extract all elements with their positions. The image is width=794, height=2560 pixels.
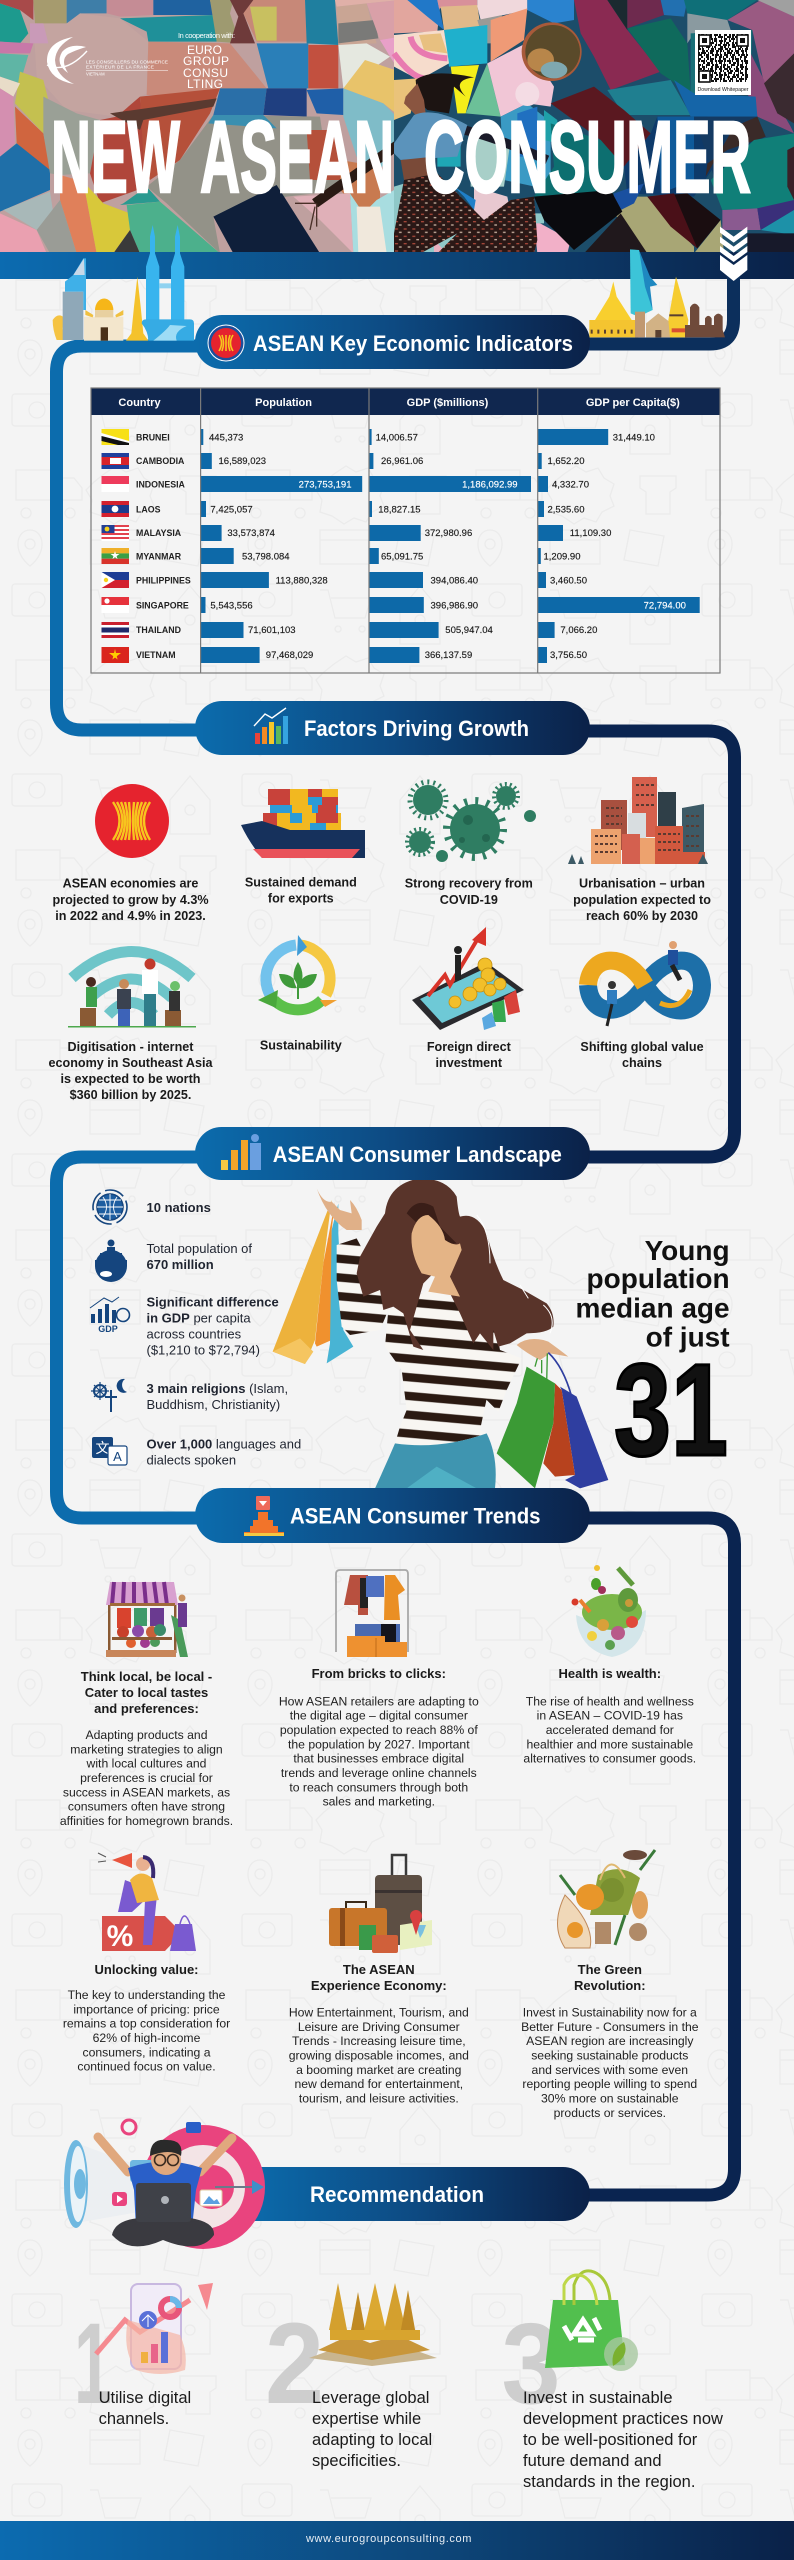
text: languages: Over 1,000 languages and [146,1436,301,1452]
logo: Eurogroup Consulting: CONSU [183,66,228,80]
text: bricks to clicks: to reach consumers through both [289,1780,468,1794]
text: sustainable practices: to be well-positioned for [523,2431,698,2449]
blue header band [0,252,794,279]
text: ASEAN growth projection: projected to grow by 4.3% [52,893,209,907]
population values: 273,753,191 [299,480,352,490]
text: think local: and preferences: [94,1701,199,1716]
logo: French foreign trade advisors: EXTÉRIEUR DE LA FRANCE [86,64,154,70]
country names: MYANMAR [136,551,182,561]
text: sustained demand: for exports [268,892,334,906]
icon: ASEAN emblem [95,784,169,858]
callout: young population [576,1235,730,1483]
logo: Eurogroup Consulting: LTING [187,77,223,91]
population values: 97,468,029 [266,650,313,661]
flags [102,429,129,663]
text: think local: affinities for homegrown brands. [60,1814,233,1828]
population values [209,432,352,661]
callout: young population: population [587,1263,730,1294]
icon: woman on price tag [98,1853,196,1953]
icon: green shopping bag and goods [558,1850,655,1948]
text: leverage global expertise: Leverage global [312,2389,429,2407]
text: GDP difference: across countries [146,1326,242,1342]
section title: ASEAN Key Economic Indicators [195,315,590,369]
GDP values: 18,827.15 [378,504,421,516]
QR code [695,30,751,95]
text: health is wealth: The rise of health and wellness [526,1694,694,1708]
text: green revolution: ASEAN region are increasingly [526,2034,694,2048]
table header [91,388,720,415]
country names: LAOS [136,504,161,514]
icon: digitisation group with wifi [68,952,196,1028]
text: foreign direct investment: investment [436,1056,503,1070]
icon: green recycling bag [545,2271,638,2371]
callout: young population: 31 [614,1336,728,1483]
section title: Factors Driving Growth: Factors Driving Growth [304,716,529,741]
icon: GDP chart: GDP [98,1324,118,1334]
text: think local: success in ASEAN markets, as [63,1785,230,1799]
country names: PHILIPPINES [136,575,191,585]
callout: young population: Young [645,1235,730,1266]
GDP per capita values: 72,794.00 [644,600,686,612]
callout: young population: of just [646,1322,730,1352]
icon: golden temple [309,2283,437,2366]
section title: ASEAN Consumer Landscape: ASEAN Consumer Landscape [273,1142,562,1167]
icon: religions [91,1379,127,1412]
headline: NEW [51,100,180,214]
GDP per capita values: 2,535.60 [548,504,584,516]
text: sustainability: Sustainability [260,1038,342,1052]
illustration: woman with shopping bags [273,1178,608,1488]
country names: VIETNAM [136,650,176,660]
text: think local: Cater to local tastes [85,1685,208,1700]
GDP values: 1,186,092.99 [462,480,518,490]
text: unlocking value: The key to understanding the [68,1988,226,2002]
text: sustained demand: Sustained demand [245,876,357,890]
GDP values: 372,980.96 [425,528,472,539]
skyline left [53,225,194,341]
GDP per capita values [544,432,686,661]
recommendation 2 [265,2283,437,2470]
GDP per capita values: 7,066.20 [560,625,597,636]
text: 10 nations: 10 nations [146,1200,211,1215]
text: think local [60,1669,233,1828]
section title: Factors Driving Growth [195,701,590,755]
text: experience economy: Leisure are Driving Consumer [298,2020,460,2034]
population values: 71,601,103 [248,625,296,636]
number 3: 3 [502,2300,560,2428]
text: unlocking value: Unlocking value: [94,1962,199,1977]
table bars [201,429,700,663]
text: recovery: Strong recovery from [405,876,533,890]
text: green revolution: 30% more on sustainable [541,2092,679,2106]
text: unlocking value: consumers, indicating a [82,2045,211,2059]
GDP per capita values: 1,209.90 [544,552,580,562]
text: urbanisation: Urbanisation – urban [579,876,705,890]
population values: 7,425,057 [210,504,253,516]
text: ASEAN growth projection: ASEAN economies are [63,876,198,890]
text: health is wealth: Health is wealth: [559,1666,661,1681]
callout: young population: median age [576,1292,730,1324]
footer band [0,2521,794,2560]
connector lines between sections [56,270,734,2195]
text: global value chains: Shifting global value [580,1040,704,1054]
icon: globe [93,1190,127,1224]
footer band: www.eurogroupconsulting.com [305,2533,472,2545]
text: green revolution: Invest in Sustainability now for a [523,2006,697,2020]
text: sustainable practices: Invest in sustainable [523,2389,673,2407]
GDP values: 65,091.75 [381,552,423,562]
text: sustainable practices: development practices now [523,2410,723,2428]
icon: salad bowl [572,1565,646,1657]
icon: phone with chart [96,2283,213,2374]
population values: 16,589,023 [218,456,266,467]
text: green revolution: reporting people willing to spend [522,2077,697,2091]
table header: GDP ($millions) [407,397,489,409]
text: green revolution: and services with some even [532,2063,688,2077]
GDP per capita values: 11,109.30 [570,528,611,539]
text: total population: 670 million [146,1257,214,1272]
text: GDP difference: ($1,210 to $72,794) [146,1342,260,1358]
skyline right [589,249,725,337]
population values: 53,798.084 [242,552,290,562]
text: think local: Adapting products and [86,1728,207,1742]
GDP per capita values: 31,449.10 [613,432,655,444]
text: think local: Think local, be local - [81,1669,212,1684]
recommendation 3 [502,2271,723,2491]
text: digitisation: is expected to be worth [61,1072,200,1086]
text: green revolution: products or services. [554,2106,666,2120]
text: leverage global expertise: specificities. [312,2452,401,2470]
text: religions: Buddhism, Christianity) [146,1397,280,1412]
text: utilise digital channels: channels. [99,2410,169,2428]
population values: 5,543,556 [210,600,253,612]
text: religions: 3 main religions (Islam, [146,1381,288,1396]
table header: Country [118,397,161,409]
GDP values: 396,986.90 [430,600,478,612]
icon: translation [92,1437,127,1465]
section title: ASEAN Consumer Trends: ASEAN Consumer Trends [290,1504,540,1528]
text: unlocking value [63,1962,230,2074]
text: total population: Total population of [146,1241,252,1256]
text: ASEAN growth projection: in 2022 and 4.9% in 2023. [55,909,206,923]
icon: infinity value chains [588,941,702,1026]
logo: Eurogroup Consulting [178,31,235,91]
icon: GDP chart [90,1297,130,1334]
GDP values: 505,947.04 [445,625,493,636]
section title: ASEAN Consumer Trends [195,1488,590,1543]
text: green revolution: seeking sustainable products [531,2048,688,2062]
text: bricks to clicks [279,1666,479,1809]
country names: CAMBODIA [136,456,185,466]
text: GDP difference: in GDP per capita [146,1310,251,1326]
text: green revolution [521,1962,699,2120]
text: experience economy: new demand for entertainment, [294,2077,463,2091]
text: recovery: COVID-19 [440,893,498,907]
text: leverage global expertise: expertise while [312,2410,421,2428]
text: green revolution: Revolution: [574,1978,646,1993]
text: unlocking value: importance of pricing: price [73,2002,220,2016]
icon: sustainability cycle [258,935,337,1010]
illustration: man with megaphone and target [64,2120,265,2249]
text: health is wealth [523,1666,696,1766]
text: think local: marketing strategies to align [70,1742,223,1756]
text: experience economy [289,1962,469,2106]
text: health is wealth: in ASEAN – COVID-19 has [537,1709,683,1723]
logo: Eurogroup Consulting: EURO [187,43,222,57]
text: utilise digital channels: Utilise digital [99,2389,191,2407]
country names: SINGAPORE [136,600,189,610]
table header: Population [255,397,312,409]
icon: market stall [106,1582,188,1657]
GDP values [376,432,518,661]
text: unlocking value: 62% of high-income [93,2031,201,2045]
text: think local: with local cultures and [86,1757,206,1771]
icon: woman on price tag: % [107,1920,133,1953]
section title: ASEAN Key Economic Indicators: ASEAN Key Economic Indicators [253,331,573,356]
icon: translation: A [113,1449,122,1464]
text: leverage global expertise: adapting to local [312,2431,432,2449]
icon: city skyline [568,777,708,864]
country names [136,432,191,660]
text: bricks to clicks: that businesses embrace digital [293,1752,464,1766]
section title: Recommendation: Recommendation [310,2182,484,2207]
GDP values: 14,006.57 [376,432,418,444]
GDP per capita values: 1,652.20 [548,456,584,467]
number 1: 1 [74,2300,112,2428]
text: digitisation: $360 billion by 2025. [70,1088,191,1102]
data table [91,388,720,673]
logo: French foreign trade advisors: LES CONSEILLERS DU COMMERCE [86,60,168,64]
GDP per capita values: 4,332.70 [552,480,589,490]
text: green revolution: Better Future - Consumers in the [521,2020,699,2034]
text: bricks to clicks: sales and marketing. [323,1795,435,1809]
icon: chevrons pointing down [720,227,747,281]
text: urbanisation: reach 60% by 2030 [586,909,698,923]
text: bricks to clicks: How ASEAN retailers are adapting to [279,1694,479,1708]
GDP values: 26,961.06 [381,456,423,467]
text: bricks to clicks: population expected to reach 88% of [280,1723,478,1737]
text: sustainable practices: standards in the region. [523,2473,695,2491]
text: health is wealth: accelerated demand for [546,1723,674,1737]
text: GDP difference: Significant difference [146,1294,279,1310]
text: bricks to clicks: the population by 2027. Important [288,1737,470,1751]
logo: Eurogroup Consulting: GROUP [183,54,229,68]
GDP values: 366,137.59 [425,650,472,661]
recommendation 1 [74,2283,213,2428]
population values: 445,373 [209,432,243,444]
population values: 33,573,874 [227,528,275,539]
text: digitisation: economy in Southeast Asia [48,1056,213,1070]
text: experience economy: The ASEAN [343,1962,415,1977]
text: global value chains: chains [622,1056,662,1070]
text: experience economy: Trends - Increasing leisure time, [292,2034,466,2048]
text: foreign direct investment: Foreign direct [427,1040,512,1054]
country names: THAILAND [136,625,181,635]
text: experience economy: How Entertainment, Tourism, and [289,2006,469,2020]
headline: ASEAN [200,100,394,214]
text: experience economy: tourism, and leisure activities. [299,2092,459,2106]
icon: population globe [95,1240,127,1282]
text: green revolution: The Green [578,1962,642,1977]
text: bricks to clicks: trends and leverage online channels [281,1766,477,1780]
GDP values: 394,086.40 [430,576,478,586]
section title: Recommendation [240,2167,590,2221]
icon: suitcases and map [329,1855,432,1953]
text: urbanisation: population expected to [573,893,711,907]
text: health is wealth: healthier and more sustainable [526,1737,693,1751]
headline [51,100,751,214]
country names: BRUNEI [136,432,170,442]
text: experience economy: growing disposable incomes, and [289,2048,469,2062]
country names: INDONESIA [136,479,186,489]
icon: clothes rack and boxes [336,1570,408,1657]
text: sustainable practices: future demand and [523,2452,662,2470]
logo: Eurogroup Consulting: In cooperation with: [178,31,235,40]
text: experience economy: Experience Economy: [311,1978,447,1993]
icon: coronavirus [407,782,536,862]
section title: ASEAN Consumer Landscape [195,1127,590,1180]
text: digitisation: Digitisation - internet [68,1040,194,1054]
icon: foreign direct investment phone and coins [412,927,524,1030]
population values: 113,880,328 [276,576,328,586]
logo: French foreign trade advisors: VIETNAM [86,72,105,76]
number 2: 2 [265,2300,324,2428]
text: bricks to clicks: From bricks to clicks: [312,1666,446,1681]
text: think local: consumers often have strong [68,1800,225,1814]
icon: translation: 文 [96,1440,110,1456]
text: health is wealth: alternatives to consumer goods. [523,1752,696,1766]
text: experience economy: a booming market are creating [296,2063,461,2077]
text: bricks to clicks: the digital age – digital consumer [290,1709,468,1723]
hero photo: mural and jumping woman [0,0,794,253]
GDP per capita values: 3,756.50 [550,650,587,661]
text: unlocking value: continued focus on value. [77,2060,216,2074]
text: think local: preferences is crucial for [80,1771,213,1785]
GDP per capita values: 3,460.50 [550,576,587,586]
country names: MALAYSIA [136,528,182,538]
text: unlocking value: remains a top consideration for [63,2017,230,2031]
logo: French foreign trade advisors [47,37,168,84]
text: languages: dialects spoken [146,1452,236,1468]
table header: GDP per Capita($) [586,397,680,409]
QR code: Download Whitepaper [698,87,749,93]
table grid [91,388,720,673]
icon: container ship [241,789,365,858]
